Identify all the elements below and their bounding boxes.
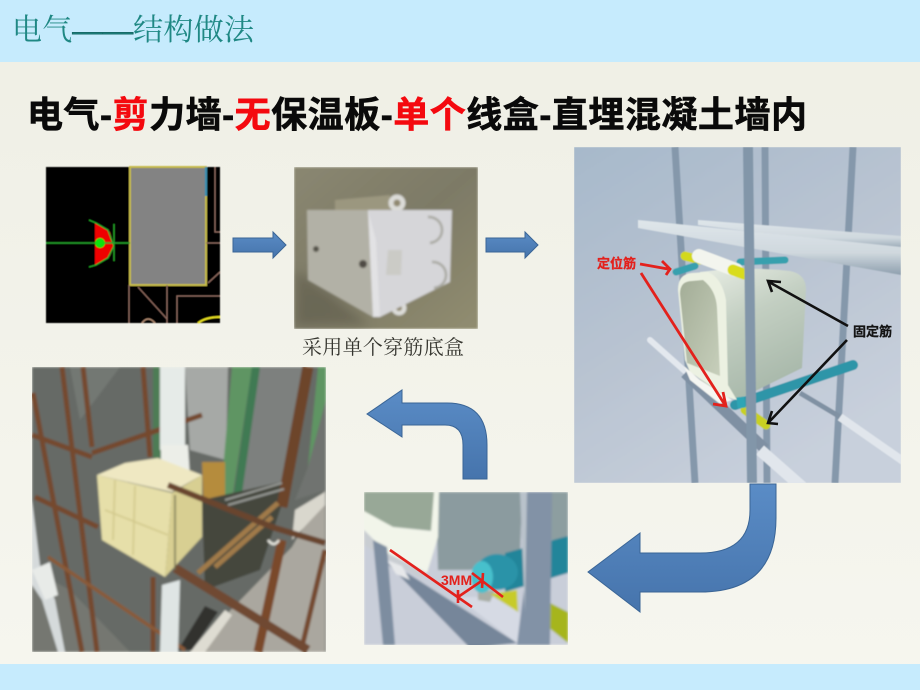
front rebar: [168, 485, 325, 543]
panel: site photo: [32, 367, 326, 652]
panel: 3mm detail: [364, 492, 568, 648]
vertical bars behind: [675, 147, 853, 483]
yellow fixing bars: [685, 256, 700, 260]
upper horizontal bars: [698, 220, 901, 250]
3mm dimension marks: [390, 550, 503, 607]
front vertical bar: [748, 147, 752, 483]
box caption: 采用单个穿筋底盒: [302, 336, 464, 359]
curved arrow: detail to site photo: [367, 390, 487, 479]
rebar: [32, 367, 325, 652]
header band: [0, 0, 920, 62]
header title: 电气——结构做法: [12, 14, 255, 47]
teal bar end: [737, 402, 745, 403]
label: fixing bars: 固定筋: [853, 324, 892, 339]
box body: [700, 269, 806, 400]
arrow: CAD to box: [233, 232, 286, 258]
teal positioning bars: [676, 260, 785, 272]
concrete and formwork: [185, 367, 228, 460]
panel: 3D model of box in rebar: [574, 147, 903, 487]
vertical bars: [373, 540, 395, 645]
label: positioning bars: [597, 256, 726, 406]
3mm dimension marks: 3MM: [441, 572, 472, 588]
curved arrow: model to detail: [588, 484, 776, 612]
arrow: box to 3D model: [486, 232, 538, 258]
main heading: 电气-剪力墙-无保温板-单个线盒-直埋混凝土墙内: [27, 94, 807, 135]
foam-wrapped box: [97, 475, 172, 577]
lower horizontal bars: [650, 340, 687, 373]
panel: CAD drawing: [46, 167, 220, 323]
label: positioning bars: 定位筋: [597, 256, 636, 271]
socket symbol: [46, 220, 130, 267]
footer band: [0, 664, 920, 690]
panel: junction box photo: [294, 167, 478, 359]
top white rod: [699, 256, 736, 270]
grey wall block: [130, 167, 206, 285]
white conduit: [160, 367, 185, 450]
horizontal bar: [387, 563, 517, 648]
teal bar: [505, 536, 568, 592]
label: fixing bars: [768, 281, 892, 424]
